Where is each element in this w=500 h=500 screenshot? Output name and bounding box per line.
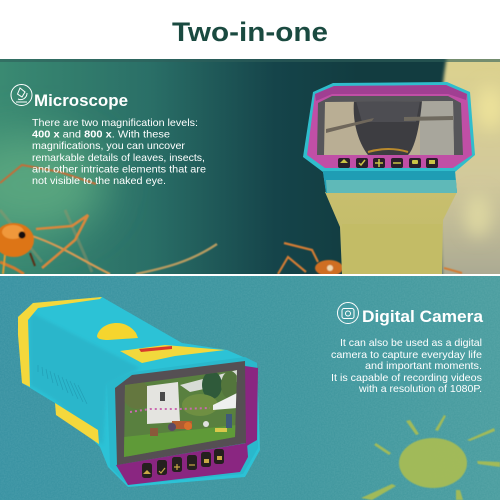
text block: microscope description <box>32 117 206 187</box>
top plate with red light <box>120 345 225 363</box>
heading: microscope icon <box>11 84 32 106</box>
yellow knob <box>97 323 138 340</box>
handle <box>325 192 457 274</box>
text block: microscope description: 400 x and 800 x. With these <box>32 128 170 140</box>
ant: foreground left <box>0 165 217 274</box>
panel background photo <box>0 55 500 280</box>
housing <box>303 82 475 193</box>
panel background texture <box>0 276 500 500</box>
ant: right of device <box>278 243 462 276</box>
heading: Microscope: Microscope <box>34 91 128 110</box>
text block: microscope description: There are two magnification levels: <box>32 117 198 129</box>
panel: microscope <box>0 55 500 280</box>
screen <box>324 101 454 155</box>
text block: microscope description: magnifications, you can uncover <box>32 140 186 152</box>
device: microscope viewer <box>303 82 475 274</box>
heading: camera icon <box>338 302 358 324</box>
device: digital camera <box>18 297 260 487</box>
text block: microscope description: remarkable details of leaves, insects, <box>32 152 205 164</box>
yellow grip band <box>18 297 102 387</box>
control buttons <box>142 449 224 478</box>
screen photo <box>122 368 240 460</box>
control buttons <box>338 158 438 168</box>
text block: camera description: with a resolution of 1080P. <box>358 383 482 395</box>
text block: camera description: It is capable of recording videos <box>331 372 482 384</box>
chalk sun <box>361 415 500 500</box>
heading: Digital Camera: Digital Camera <box>362 307 484 326</box>
text block: microscope description: and other intricate elements that are <box>32 164 206 176</box>
text block: camera description: camera to capture everyday life <box>331 349 482 361</box>
text block: camera description: and important moments. <box>365 360 482 372</box>
side vents <box>38 365 87 404</box>
front frame <box>107 357 258 485</box>
panel: digital camera <box>0 276 500 500</box>
title: Two-in-one <box>172 17 328 47</box>
yellow lower strip <box>55 403 99 444</box>
text block: camera description <box>331 337 482 395</box>
body <box>18 297 260 487</box>
text block: microscope description: not visible to the naked eye. <box>32 175 166 187</box>
text block: camera description: It can also be used as a digital <box>340 337 482 349</box>
